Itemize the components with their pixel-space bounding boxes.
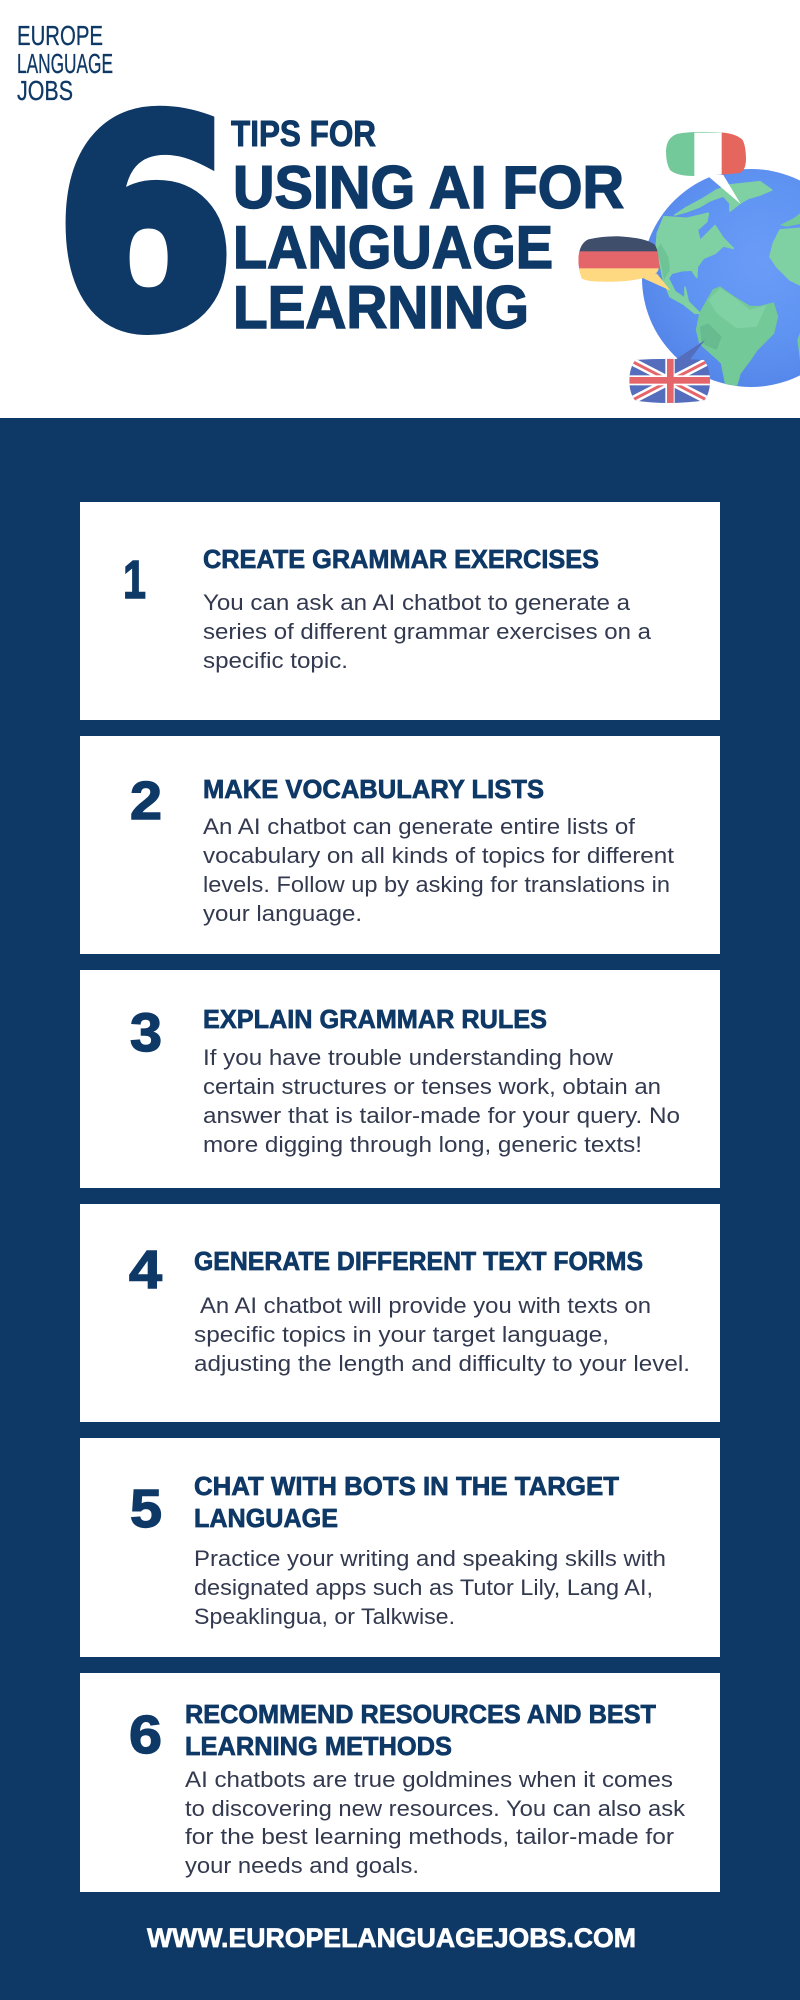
panel: tip 4: [80, 1204, 720, 1422]
heading: CHAT WITH BOTS IN THE TARGET: [194, 1471, 619, 1501]
panel: tip 5: [80, 1438, 720, 1657]
heading: CREATE GRAMMAR EXERCISES: [203, 544, 599, 574]
illustration: globe with speech bubbles: [577, 130, 800, 407]
title: [231, 113, 624, 341]
body text: An AI chatbot will provide you with texts on: [200, 1293, 651, 1318]
logo: Europe Language Jobs: LANGUAGE: [17, 48, 113, 79]
heading: LEARNING METHODS: [185, 1731, 452, 1761]
title: USING AI FOR: [233, 154, 624, 221]
body text: [194, 1546, 666, 1629]
number 2: 2: [130, 771, 162, 831]
body text: specific topic.: [203, 648, 348, 673]
body text: [185, 1767, 686, 1878]
speech bubble: Italian flag: [663, 130, 748, 204]
body text: for the best learning methods, tailor-made for: [185, 1824, 674, 1849]
title: LANGUAGE: [233, 214, 553, 281]
number 1: 1: [123, 550, 146, 610]
speech bubble: German flag: [577, 233, 671, 291]
body text: adjusting the length and difficulty to your level.: [194, 1351, 690, 1376]
globe: [642, 169, 800, 387]
body text: your needs and goals.: [185, 1853, 419, 1878]
panel: tip 2: [80, 736, 720, 954]
heading: LANGUAGE: [194, 1503, 338, 1533]
background: navy panel: [0, 418, 800, 2000]
body text: AI chatbots are true goldmines when it comes: [185, 1767, 673, 1792]
heading: GENERATE DIFFERENT TEXT FORMS: [194, 1246, 643, 1276]
panel: tip 1: [80, 502, 720, 720]
body text: more digging through long, generic texts!: [203, 1132, 642, 1157]
body text: series of different grammar exercises on a: [203, 619, 652, 644]
body text: certain structures or tenses work, obtain an: [203, 1074, 661, 1099]
body text: [203, 1045, 680, 1157]
body text: You can ask an AI chatbot to generate a: [203, 590, 631, 615]
footer: website URL: WWW.EUROPELANGUAGEJOBS.COM: [147, 1923, 636, 1953]
body text: If you have trouble understanding how: [203, 1045, 613, 1070]
body text: Practice your writing and speaking skills with: [194, 1546, 666, 1571]
body text: An AI chatbot can generate entire lists of: [203, 814, 636, 839]
body text: [194, 1293, 690, 1376]
body text: [203, 590, 652, 673]
heading: RECOMMEND RESOURCES AND BEST: [185, 1699, 656, 1729]
logo: Europe Language Jobs: JOBS: [17, 75, 73, 106]
background: white header: [0, 0, 800, 418]
heading: [185, 1699, 656, 1761]
number 3: 3: [130, 1003, 162, 1063]
title: LEARNING: [233, 274, 529, 341]
panel: tip 6: [80, 1673, 720, 1892]
body text: answer that is tailor-made for your query. No: [203, 1103, 680, 1128]
logo: Europe Language Jobs: [17, 20, 113, 106]
body text: [203, 814, 674, 926]
title: TIPS FOR: [231, 113, 376, 154]
body text: specific topics in your target language,: [194, 1322, 609, 1347]
big numeral 6: 6: [56, 60, 234, 392]
body text: designated apps such as Tutor Lily, Lang AI,: [194, 1575, 653, 1600]
speech bubble: UK flag: [629, 340, 710, 403]
body text: your language.: [203, 901, 362, 926]
heading: MAKE VOCABULARY LISTS: [203, 774, 544, 804]
logo: Europe Language Jobs: EUROPE: [17, 20, 103, 51]
body text: to discovering new resources. You can also ask: [185, 1796, 686, 1821]
body text: vocabulary on all kinds of topics for different: [203, 843, 674, 868]
body text: Speaklingua, or Talkwise.: [194, 1604, 455, 1629]
body text: levels. Follow up by asking for translations in: [203, 872, 670, 897]
heading: [194, 1471, 619, 1533]
panel: tip 3: [80, 970, 720, 1188]
heading: EXPLAIN GRAMMAR RULES: [203, 1004, 547, 1034]
number 4: 4: [129, 1240, 162, 1300]
number 6: 6: [129, 1705, 162, 1765]
number 5: 5: [130, 1479, 162, 1539]
